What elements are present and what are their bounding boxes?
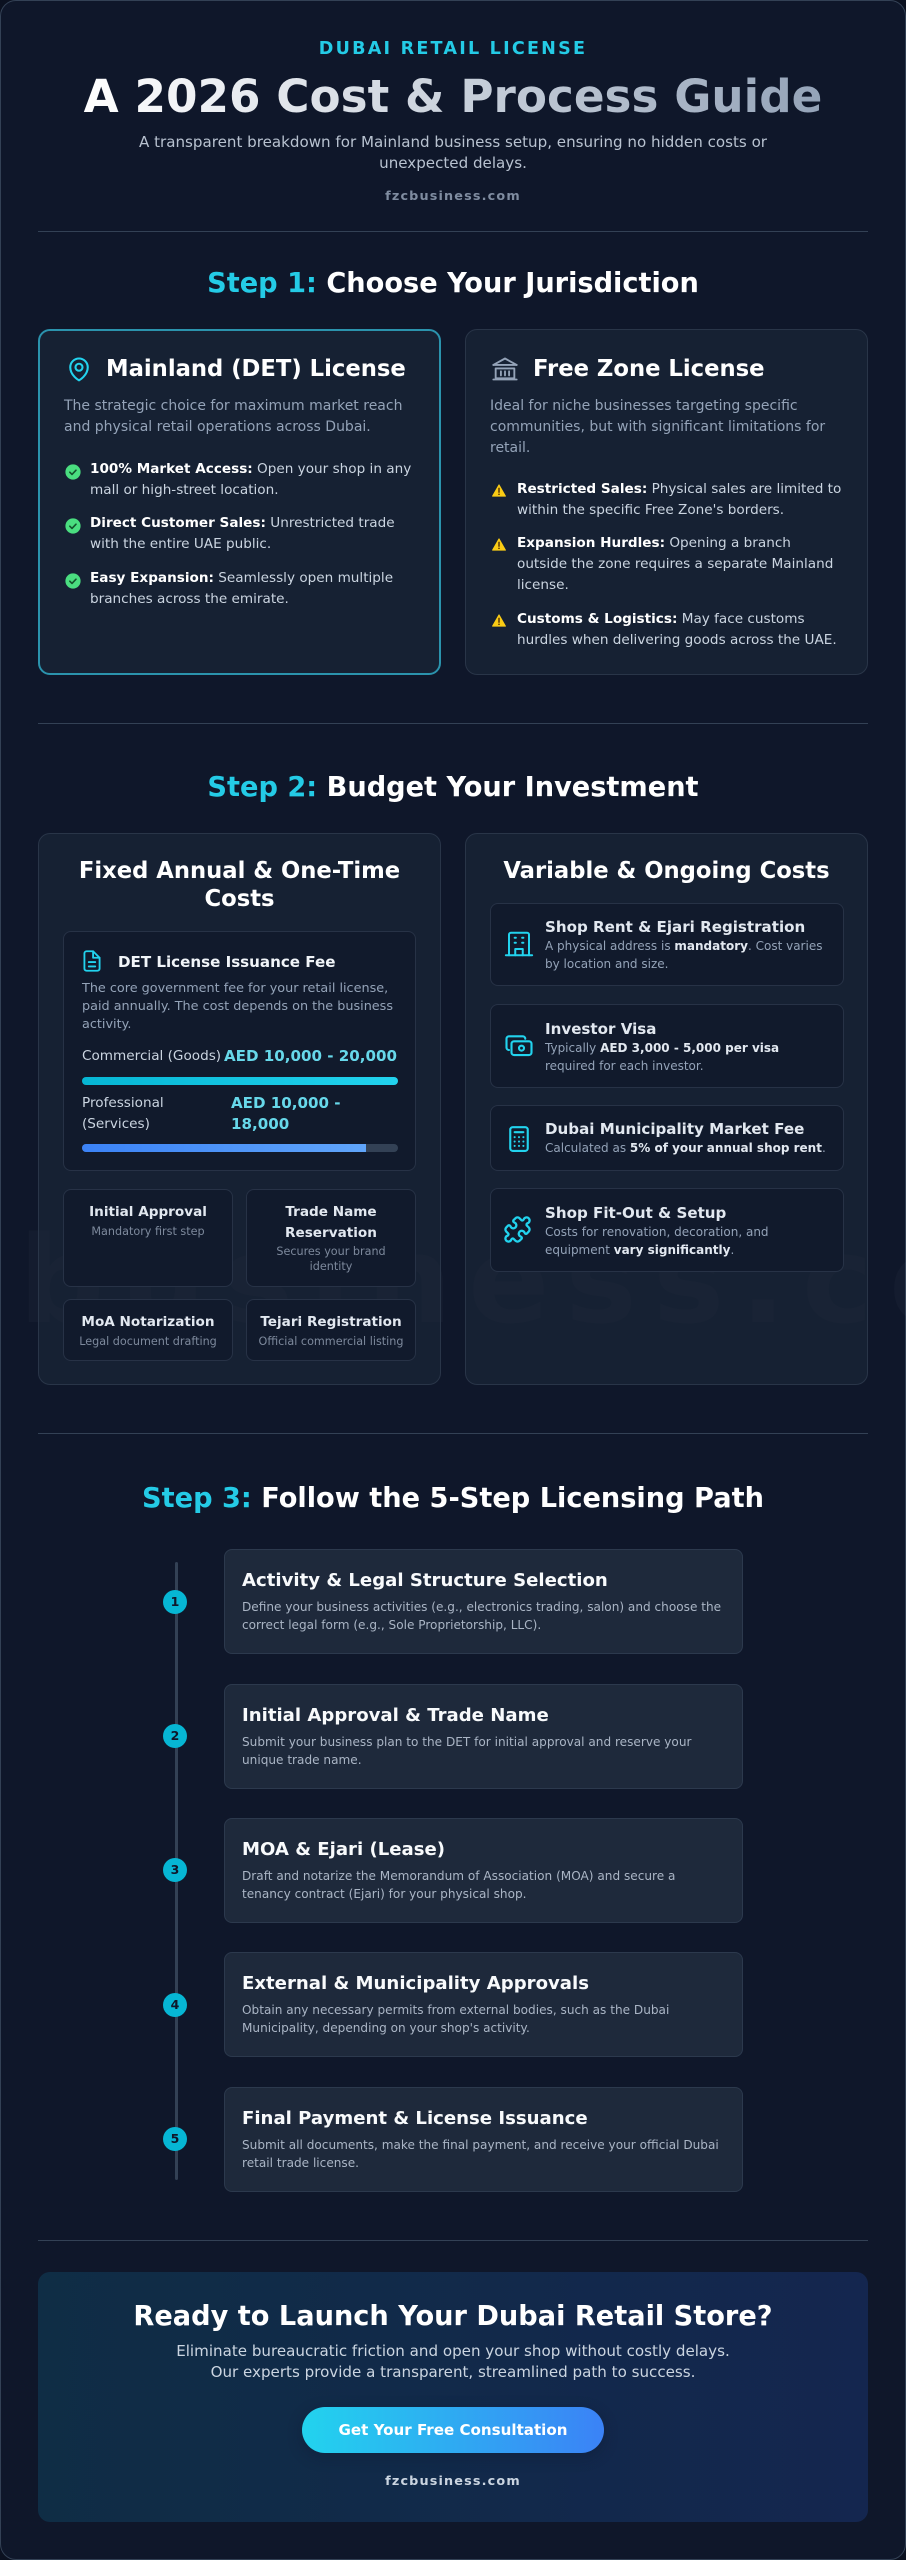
step card 2: Submit your business plan to the DET for initial approval and reserve your xyxy=(242,1735,691,1749)
step card 1: Activity & Legal Structure Selection xyxy=(242,1570,608,1591)
tile: initial approval xyxy=(63,1189,233,1287)
panel title: Free Zone License xyxy=(533,356,764,382)
commercial bar xyxy=(82,1077,398,1085)
subtitle: unexpected delays. xyxy=(379,154,527,172)
item: investor visa xyxy=(490,1004,844,1088)
title: A 2026 Cost & Process Guide xyxy=(84,70,822,123)
header xyxy=(84,39,822,204)
panel: variable costs xyxy=(465,833,868,1385)
panel: free zone license xyxy=(465,329,868,675)
tile: MoA notarization: MoA Notarization xyxy=(81,1314,215,1330)
item: municipality fee: Dubai Municipality Market Fee xyxy=(545,1120,804,1138)
professional label: Professional xyxy=(82,1095,164,1111)
heading: step 2: Step 2: Budget Your Investment xyxy=(207,772,699,803)
step card 5: Submit all documents, make the final payment, and receive your official Dubai xyxy=(242,2138,719,2152)
cta website: fzcbusiness.com xyxy=(385,2474,521,2489)
step number 2 xyxy=(163,1724,187,1748)
panel: mainland license xyxy=(38,329,441,675)
tile: initial approval: Mandatory first step xyxy=(91,1225,205,1238)
item: shop rent xyxy=(490,903,844,986)
card title: DET License Issuance Fee xyxy=(118,953,335,971)
cta text: Eliminate bureaucratic friction and open your shop without costly delays. xyxy=(176,2342,730,2360)
panel title: Variable & Ongoing Costs xyxy=(503,858,830,884)
step number 1: 1 xyxy=(171,1594,179,1609)
icon: document xyxy=(84,950,100,972)
step card 5 xyxy=(224,2087,743,2192)
panel description: Ideal for niche businesses targeting specific communities, but with significant limitations for retail. xyxy=(490,398,825,456)
limitation 1: Restricted Sales: Physical sales are limited to within the specific Free Zone's borders. xyxy=(517,481,841,518)
panel title: Mainland (DET) License xyxy=(106,356,406,382)
step card 5: Final Payment & License Issuance xyxy=(242,2108,588,2129)
step number 5 xyxy=(163,2127,187,2151)
tile: tejari registration: Official commercial listing xyxy=(259,1335,403,1348)
tile: MoA notarization xyxy=(63,1299,233,1361)
icon: calculator xyxy=(509,1126,529,1152)
card description: The core government fee for your retail license, paid annually. The cost depends on the business activity. xyxy=(82,981,393,1032)
icon: location pin xyxy=(69,358,89,382)
eyebrow: DUBAI RETAIL LICENSE xyxy=(319,39,587,59)
limitation 3: Customs & Logistics: May face customs hurdles when delivering goods across the UAE. xyxy=(517,611,837,648)
step card 2: unique trade name. xyxy=(242,1753,362,1767)
tile: trade name reservation: Trade Name Reservation xyxy=(285,1204,377,1241)
step card 3 xyxy=(224,1818,743,1923)
step number 5: 5 xyxy=(171,2131,179,2146)
benefit 1: 100% Market Access: Open your shop in any mall or high-street location. xyxy=(90,461,411,498)
tile: trade name reservation: Secures your brand identity xyxy=(276,1245,386,1273)
icon: cash xyxy=(505,1035,533,1056)
item: investor visa: Typically AED 3,000 - 5,000 per visa xyxy=(545,1041,779,1055)
step card 1: correct legal form (e.g., Sole Proprietorship, LLC). xyxy=(242,1618,541,1632)
tile: MoA notarization: Legal document drafting xyxy=(79,1335,217,1348)
panel description: The strategic choice for maximum market reach and physical retail operations across Dubai. xyxy=(64,398,402,435)
professional bar xyxy=(82,1144,398,1152)
heading: step 3: Step 3: Follow the 5-Step Licensing Path xyxy=(142,1483,764,1514)
step card 4: Municipality, depending on your shop's activity. xyxy=(242,2021,530,2035)
item: municipality fee: Calculated as 5% of your annual shop rent. xyxy=(545,1141,826,1155)
commercial label: Commercial (Goods) xyxy=(82,1048,221,1064)
item: fit-out xyxy=(490,1188,844,1272)
step card 4: External & Municipality Approvals xyxy=(242,1973,589,1994)
professional label xyxy=(82,1095,164,1132)
subtitle xyxy=(139,133,767,172)
heading: step 1: Step 1: Choose Your Jurisdiction xyxy=(207,268,699,299)
cta text: Our experts provide a transparent, streamlined path to success. xyxy=(211,2363,695,2381)
step number 4: 4 xyxy=(171,1997,179,2012)
cta heading: Ready to Launch Your Dubai Retail Store? xyxy=(133,2301,773,2332)
icon: puzzle xyxy=(504,1216,531,1243)
step card 1: Define your business activities (e.g., electronics trading, salon) and choose the xyxy=(242,1600,721,1614)
timeline line xyxy=(175,1562,178,2180)
step number 1 xyxy=(163,1590,187,1614)
commercial value: AED 10,000 - 20,000 xyxy=(224,1047,397,1065)
step number 3 xyxy=(163,1858,187,1882)
subtitle: A transparent breakdown for Mainland business setup, ensuring no hidden costs or xyxy=(139,133,767,151)
item: shop rent: by location and size. xyxy=(545,957,668,971)
item: fit-out: Costs for renovation, decoration, and equipment vary significantly. xyxy=(545,1225,769,1257)
tile: tejari registration xyxy=(246,1299,416,1361)
icon: institution xyxy=(492,358,518,380)
step card 2: Initial Approval & Trade Name xyxy=(242,1705,549,1726)
tile: initial approval: Initial Approval xyxy=(89,1204,207,1220)
tile: tejari registration: Tejari Registration xyxy=(260,1314,402,1330)
professional label: (Services) xyxy=(82,1116,150,1132)
cta button: Get Your Free Consultation xyxy=(338,2421,567,2439)
step card 2 xyxy=(224,1684,743,1789)
step card 3: tenancy contract (Ejari) for your physical shop. xyxy=(242,1887,526,1901)
item: investor visa: required for each investor. xyxy=(545,1059,704,1073)
icon: building xyxy=(504,932,534,956)
professional value: 18,000 xyxy=(231,1115,289,1133)
step card 5: retail trade license. xyxy=(242,2156,359,2170)
benefit 2: Direct Customer Sales: Unrestricted trade with the entire UAE public. xyxy=(90,515,395,552)
professional value xyxy=(231,1094,341,1133)
item: fit-out: Shop Fit-Out & Setup xyxy=(545,1204,726,1222)
step card 3: Draft and notarize the Memorandum of Association (MOA) and secure a xyxy=(242,1869,675,1883)
benefit 3: Easy Expansion: Seamlessly open multiple branches across the emirate. xyxy=(90,570,393,607)
website: fzcbusiness.com xyxy=(385,189,521,204)
step card 3: MOA & Ejari (Lease) xyxy=(242,1839,445,1860)
limitation 2: Expansion Hurdles: Opening a branch outside the zone requires a separate Mainland license. xyxy=(517,535,833,593)
step card 4 xyxy=(224,1952,743,2057)
step card 4: Obtain any necessary permits from external bodies, such as the Dubai xyxy=(242,2003,669,2017)
item: shop rent: A physical address is mandatory. Cost varies xyxy=(545,939,822,953)
step number 3: 3 xyxy=(171,1862,179,1877)
item: shop rent: Shop Rent & Ejari Registration xyxy=(545,918,805,936)
tile: trade name reservation xyxy=(246,1189,416,1287)
cta text xyxy=(176,2342,730,2381)
card: DET license fee xyxy=(63,931,416,1171)
step number 4 xyxy=(163,1993,187,2017)
professional bar fill xyxy=(82,1144,366,1152)
step number 2: 2 xyxy=(171,1728,179,1743)
item: investor visa: Investor Visa xyxy=(545,1020,656,1038)
cta button xyxy=(302,2407,604,2453)
timeline xyxy=(175,1562,178,2180)
professional value: AED 10,000 - xyxy=(231,1094,341,1112)
panel: call to action xyxy=(38,2272,868,2522)
step card 1 xyxy=(224,1549,743,1654)
panel title: Fixed Annual & One-Time Costs xyxy=(79,858,400,912)
item: municipality fee xyxy=(490,1105,844,1171)
panel: fixed costs xyxy=(38,833,441,1385)
